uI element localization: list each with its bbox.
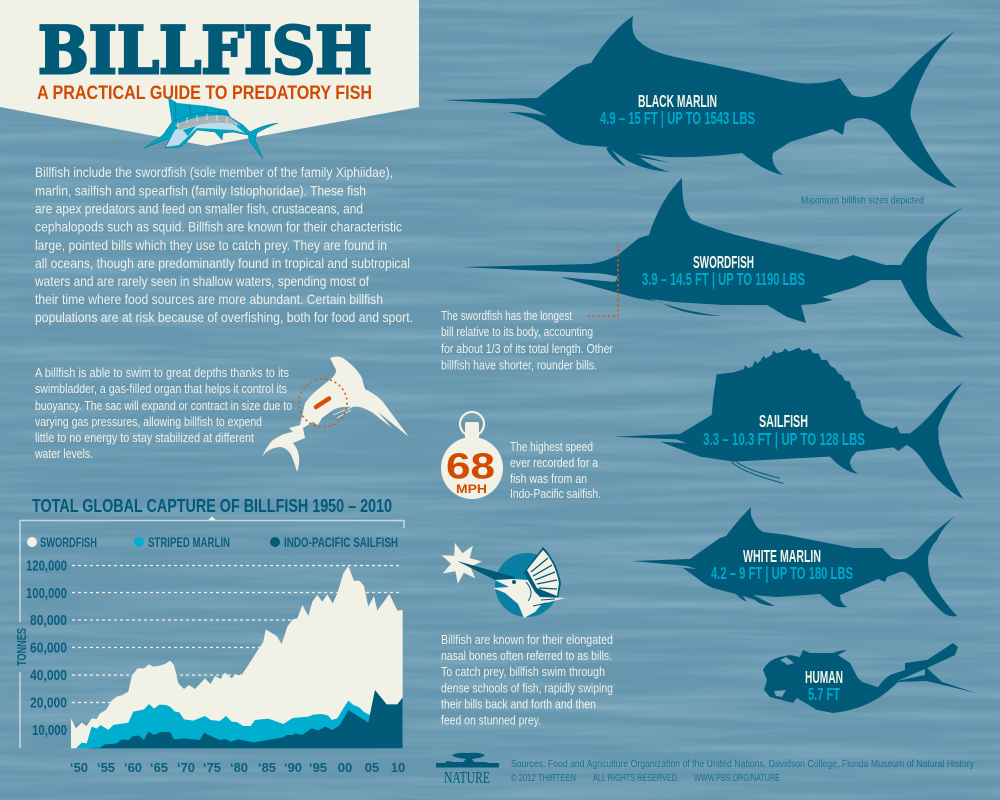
text: swimbladder: varying gas pressures, allowing billfish to expend (35, 415, 262, 429)
x axis labels: ‘85 (258, 760, 276, 775)
x axis labels: ‘60 (124, 760, 142, 775)
y axis labels: 100,000 (26, 586, 67, 602)
legend: SWORDFISH (40, 534, 97, 550)
text: nasal bones: To catch prey, billfish swim through (441, 665, 605, 679)
x axis labels (70, 760, 405, 775)
text: nasal bones: dense schools of fish, rapidly swiping (441, 682, 613, 696)
x axis labels: ‘55 (97, 760, 115, 775)
text: sources and credits: © 2012 THIRTEEN (511, 772, 576, 784)
x axis labels: ‘90 (284, 760, 302, 775)
y axis labels: 10,000 (32, 723, 67, 739)
text: top speed: fish was from an (510, 472, 587, 486)
black marlin silhouette (442, 16, 957, 188)
y axis labels: 80,000 (30, 613, 67, 629)
icon: stopwatch 68 mph: 68 (446, 446, 495, 486)
x axis labels: ‘70 (177, 760, 195, 775)
label (703, 411, 865, 449)
y axis labels: 120,000 (26, 558, 67, 574)
label (711, 546, 853, 583)
y axis labels: TONNES (14, 628, 29, 666)
text: intro paragraph: large, pointed bills which they use to catch prey. They are found in (35, 237, 387, 253)
text: intro paragraph: cephalopods such as squid. Billfish are known for their characteristic (35, 218, 402, 234)
text: swimbladder: buoyancy. The sac will expand or contract in size due to (35, 399, 292, 413)
y axis labels: 40,000 (30, 668, 67, 684)
legend: STRIPED MARLIN (148, 534, 230, 550)
label (805, 667, 843, 704)
text: intro paragraph (34, 164, 413, 325)
legend (27, 534, 398, 550)
text: nasal bones: nasal bones often referred to as bills. (441, 649, 612, 663)
text: intro paragraph: marlin, sailfish and spearfish (family Istiophoridae). These fish (35, 182, 366, 198)
text: swordfish bill: The swordfish has the longest (441, 309, 572, 323)
label (642, 252, 805, 289)
title: BILLFISH (38, 13, 372, 89)
x axis labels: 10 (391, 760, 405, 775)
label: 4.9 – 15 FT | UP TO 1543 LBS (600, 108, 755, 128)
icon: stopwatch 68 mph (441, 412, 503, 499)
label (600, 91, 755, 128)
x axis labels: ‘50 (70, 760, 88, 775)
label: 3.3 – 10.3 FT | UP TO 128 LBS (703, 429, 865, 449)
text: top speed: The highest speed (510, 440, 593, 454)
text: top speed: ever recorded for a (510, 456, 598, 470)
x axis labels: ‘65 (150, 760, 168, 775)
text: sources and credits: ALL RIGHTS RESERVED. (593, 772, 679, 784)
x axis labels: 05 (365, 760, 379, 775)
text: swimbladder: swimbladder, a gas-filled organ that helps it control its (35, 382, 287, 396)
text: swordfish bill: billfish have shorter, rounder bills. (441, 358, 597, 372)
text: swimbladder (34, 366, 292, 461)
y axis labels: 60,000 (30, 640, 67, 656)
x axis labels: ‘75 (203, 760, 221, 775)
text: swordfish bill: for about 1/3 of its total length. Other (441, 342, 613, 356)
text: sources and credits (511, 758, 975, 784)
title banner (0, 0, 419, 146)
y axis labels: 20,000 (30, 696, 67, 712)
text: sources and credits: WWW.PBS.ORG/NATURE (694, 772, 780, 784)
text: swimbladder: water levels. (34, 447, 93, 461)
label: 5.7 FT (808, 684, 840, 704)
note: maximum sizes: Maximum billfish sizes depicted (801, 194, 924, 206)
y axis labels (14, 558, 67, 739)
label: 4.2 – 9 FT | UP TO 180 LBS (711, 563, 853, 583)
text: intro paragraph: Billfish include the swordfish (sole member of the family Xiphiidae), (35, 164, 393, 180)
text: intro paragraph: populations are at risk because of overfishing, both for food and sport. (35, 309, 413, 325)
label: WHITE MARLIN (743, 546, 821, 566)
x axis labels: ‘80 (230, 760, 248, 775)
text: nasal bones: feed on stunned prey. (441, 714, 541, 728)
x axis labels: ‘95 (309, 760, 327, 775)
legend: INDO-PACIFIC SAILFISH (284, 534, 398, 550)
text: swordfish bill: bill relative to its body, accounting (441, 325, 593, 339)
swordfish silhouette (460, 178, 964, 338)
text: swimbladder: little to no energy to stay stabilized at different (35, 431, 254, 445)
text: swordfish bill (441, 309, 613, 372)
text: nasal bones: Billfish are known for their elongated (441, 633, 613, 647)
x axis labels: 00 (338, 760, 352, 775)
chart heading: TOTAL GLOBAL CAPTURE OF BILLFISH 1950 – 2010 (32, 496, 392, 516)
white marlin silhouette (632, 507, 957, 616)
label: BLACK MARLIN (638, 91, 717, 111)
text: top speed (510, 440, 601, 501)
text: intro paragraph: all oceans, though are predominantly found in tropical and subtropical (35, 255, 410, 271)
label: HUMAN (805, 667, 843, 687)
human diver silhouette (763, 643, 976, 713)
icon: leaping fish with swimbladder (262, 356, 409, 472)
icon: star burst and sailfish striking (442, 543, 565, 618)
icon: blue marlin illustration (144, 97, 278, 159)
label: SWORDFISH (693, 252, 754, 272)
text: nasal bones: their bills back and forth and then (441, 698, 596, 712)
text: swimbladder: A billfish is able to swim to great depths thanks to its (35, 366, 289, 380)
logo: Nature: NATURE (444, 768, 490, 787)
text: intro paragraph: waters and are rarely seen in shallow waters, spending most of (34, 273, 369, 289)
label: 3.9 – 14.5 FT | UP TO 1190 LBS (642, 269, 805, 289)
subtitle: A PRACTICAL GUIDE TO PREDATORY FISH (37, 82, 372, 104)
sailfish silhouette (613, 347, 963, 499)
icon: stopwatch 68 mph: MPH (456, 484, 487, 496)
area series (71, 566, 403, 748)
logo: Nature (436, 753, 499, 787)
text: top speed: Indo-Pacific sailfish. (510, 487, 601, 501)
text: intro paragraph: their time where food sources are more abundant. Certain billfish (35, 291, 383, 307)
label: SAILFISH (759, 411, 808, 431)
callout line (587, 244, 618, 316)
text: nasal bones (441, 633, 613, 728)
text: intro paragraph: are apex predators and feed on smaller fish, crustaceans, and (35, 200, 363, 216)
chart: global capture area chart (14, 516, 405, 775)
